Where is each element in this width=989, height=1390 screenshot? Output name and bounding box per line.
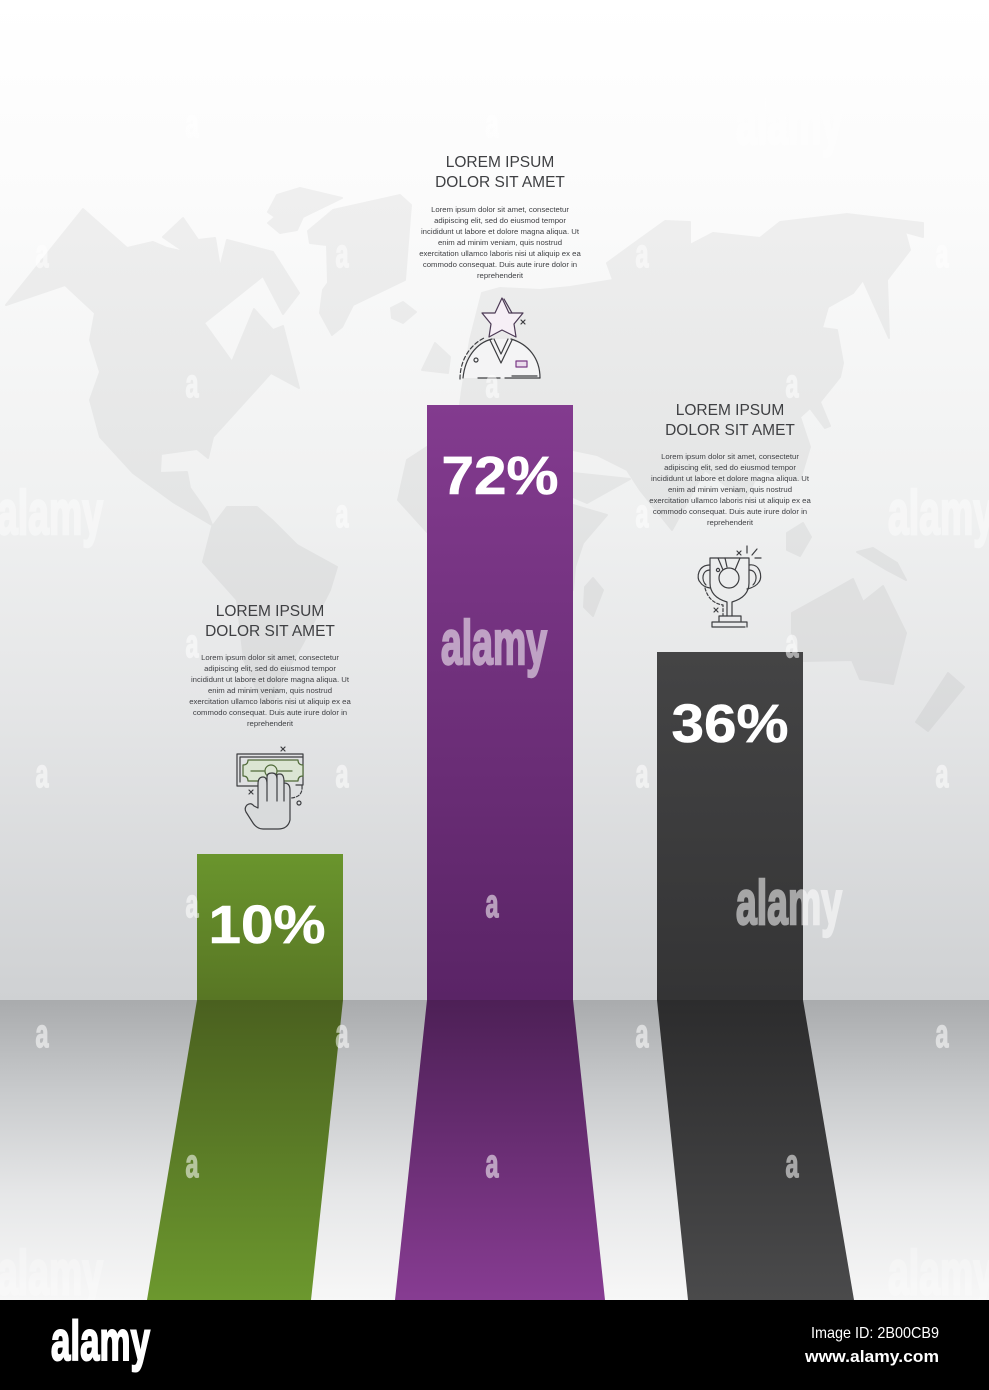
watermark: large logos: alamy (0, 1239, 103, 1308)
watermark: small marks: a (186, 102, 199, 146)
watermark: small marks: a (486, 102, 499, 146)
body: left column: commodo consequat. Duis aute irure dolor in (193, 708, 347, 717)
text block: right column (649, 402, 811, 527)
watermark: small marks: a (636, 752, 649, 796)
bar: dark 36% (657, 652, 803, 1000)
watermark: small marks: a (186, 622, 199, 666)
value: 10%: 10% (208, 895, 326, 955)
bar: purple 72% (427, 405, 573, 1000)
bar: dark floor projection (657, 1000, 854, 1300)
watermark: small marks: a (636, 492, 649, 536)
watermark: small marks: a (786, 362, 799, 406)
icon: hand on banknote (237, 747, 303, 829)
footer url: www.alamy.com (804, 1347, 939, 1366)
value: 72%: 72% (442, 446, 558, 506)
body: centre column: enim ad minim veniam, quis nostrud (438, 238, 562, 247)
body: right column: enim ad minim veniam, quis nostrud (668, 485, 792, 494)
floor (0, 1000, 989, 1300)
world map (6, 188, 964, 731)
watermark: small marks: a (486, 362, 499, 406)
body: centre column: Lorem ipsum dolor sit amet, consectetur (431, 205, 569, 214)
watermark: small marks: a (336, 492, 349, 536)
footer bar (0, 1300, 989, 1390)
watermark: small marks: a (486, 1142, 499, 1186)
body: left column: reprehenderit (247, 719, 294, 728)
body: right column: exercitation ullamco laboris nisi ut aliquip ex ea (649, 496, 811, 505)
text block: left column (189, 603, 351, 728)
body: left column: exercitation ullamco laboris nisi ut aliquip ex ea (189, 697, 351, 706)
bar: green 10% (197, 854, 343, 1000)
watermark: small marks: a (936, 752, 949, 796)
watermark: small marks: a (36, 752, 49, 796)
watermark: small marks: a (636, 1012, 649, 1056)
watermark: small marks: a (186, 1142, 199, 1186)
bar: purple floor projection (395, 1000, 605, 1300)
watermark: small marks: a (786, 622, 799, 666)
body: centre column: incididunt ut labore et dolore magna aliqua. Ut (421, 227, 580, 236)
watermark: small marks: a (336, 232, 349, 276)
body: centre column: reprehenderit (477, 271, 524, 280)
body: centre column: exercitation ullamco laboris nisi ut aliquip ex ea (419, 249, 581, 258)
watermark: small marks: a (36, 232, 49, 276)
body: right column: commodo consequat. Duis aute irure dolor in (653, 507, 807, 516)
body: left column: Lorem ipsum dolor sit amet, consectetur (201, 653, 339, 662)
icon: trophy with medal (698, 546, 761, 627)
body: left column: adipiscing elit, sed do eiusmod tempor (204, 664, 336, 673)
text block: centre column (419, 154, 581, 280)
heading: right column: LOREM IPSUM (676, 402, 784, 419)
body: right column: incididunt ut labore et dolore magna aliqua. Ut (651, 474, 810, 483)
watermark: small marks: a (186, 362, 199, 406)
body: centre column: adipiscing elit, sed do eiusmod tempor (434, 216, 566, 225)
body: left column: incididunt ut labore et dolore magna aliqua. Ut (191, 675, 350, 684)
watermark: large logos: alamy (0, 479, 103, 548)
watermark: small marks: a (186, 882, 199, 926)
watermark: large logos: alamy (441, 609, 547, 678)
heading: centre column: LOREM IPSUM (446, 154, 554, 171)
watermark: small marks: a (336, 752, 349, 796)
footer logo: alamy (51, 1309, 150, 1372)
body: right column: reprehenderit (707, 518, 754, 527)
watermark: small marks: a (36, 1012, 49, 1056)
footer image id: Image ID: 2B00CB9 (811, 1325, 939, 1342)
icon: star above person (460, 298, 540, 379)
watermark: small marks: a (936, 232, 949, 276)
bar: green floor projection (147, 1000, 343, 1300)
value: 36%: 36% (672, 694, 788, 754)
body: right column: Lorem ipsum dolor sit amet, consectetur (661, 452, 799, 461)
watermark: small marks: a (636, 232, 649, 276)
watermark: small marks: a (786, 1142, 799, 1186)
heading: centre column: DOLOR SIT AMET (435, 174, 565, 191)
heading: left column: LOREM IPSUM (216, 603, 324, 620)
watermark: large logos: alamy (736, 869, 842, 938)
watermark: small marks: a (486, 882, 499, 926)
watermark: small marks (36, 102, 949, 1186)
heading: left column: DOLOR SIT AMET (205, 623, 335, 640)
body: right column: adipiscing elit, sed do eiusmod tempor (664, 463, 796, 472)
body: left column: enim ad minim veniam, quis nostrud (208, 686, 332, 695)
body: centre column: commodo consequat. Duis aute irure dolor in (423, 260, 577, 269)
heading: right column: DOLOR SIT AMET (665, 422, 795, 439)
watermark: small marks: a (936, 1012, 949, 1056)
background wall (0, 0, 989, 1000)
watermark: large logos: alamy (736, 89, 842, 158)
watermark: small marks: a (336, 1012, 349, 1056)
